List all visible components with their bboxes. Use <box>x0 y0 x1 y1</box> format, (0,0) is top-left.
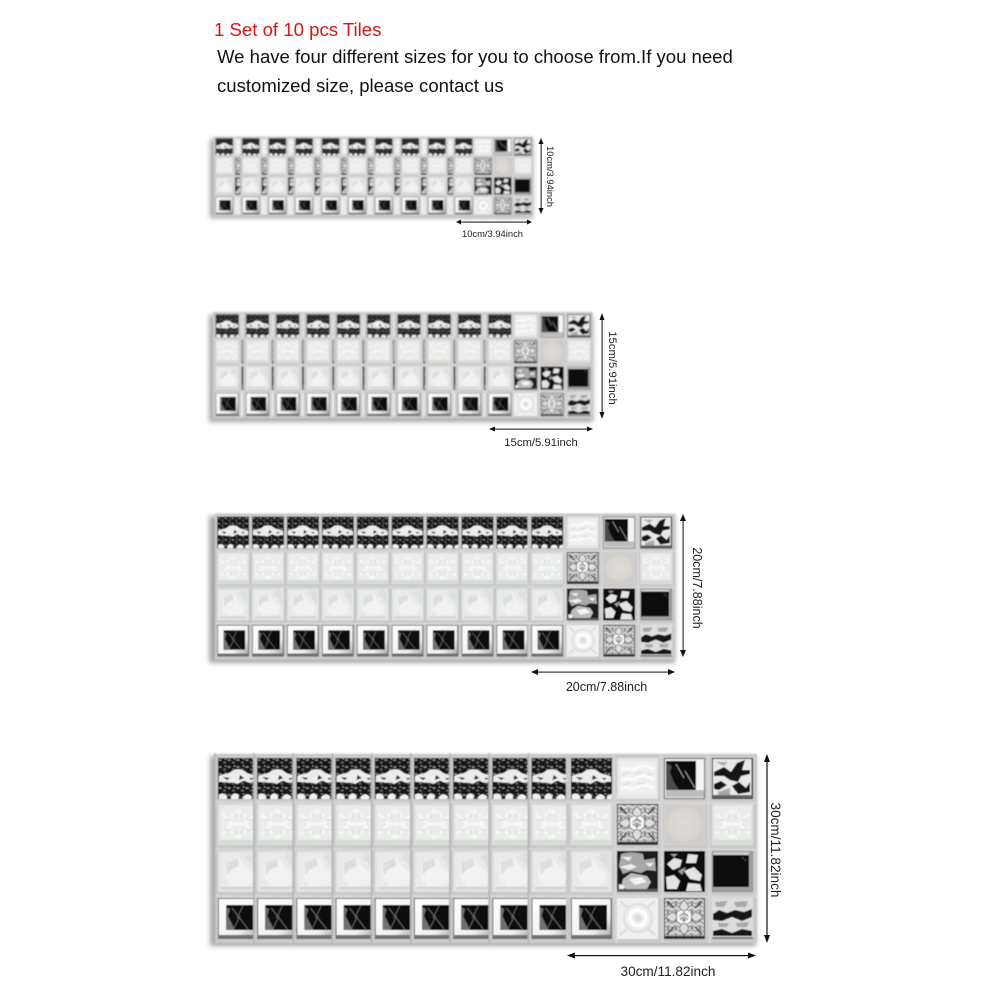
dimension arrows: 10cm <box>456 138 544 224</box>
tile panel: 30cm size <box>210 753 757 946</box>
dimension arrows: 30cm <box>567 754 770 958</box>
intro text: We have four different sizes for you to choose from.If you need <box>217 46 733 67</box>
width label: 10cm: 10cm/3.94inch <box>462 228 523 239</box>
heading: 1 Set of 10 pcs Tiles: 1 Set of 10 pcs Tiles <box>214 19 381 40</box>
height label: 15cm: 15cm/5.91inch <box>606 331 618 405</box>
height label: 20cm: 20cm/7.88inch <box>690 547 704 629</box>
tile panel: 10cm size <box>210 137 533 218</box>
dimension arrows: 15cm <box>489 313 604 432</box>
intro text <box>217 46 733 96</box>
height label: 30cm: 30cm/11.82inch <box>768 803 783 897</box>
tile panel: 20cm size <box>209 514 675 663</box>
dimension arrows: 20cm <box>531 514 686 675</box>
width label: 30cm: 30cm/11.82inch <box>621 964 715 979</box>
tile panel: 15cm size <box>209 312 593 422</box>
intro text: customized size, please contact us <box>217 75 504 96</box>
height label: 10cm: 10cm/3.94inch <box>545 146 556 207</box>
width label: 20cm: 20cm/7.88inch <box>566 680 647 694</box>
width label: 15cm: 15cm/5.91inch <box>504 437 578 449</box>
